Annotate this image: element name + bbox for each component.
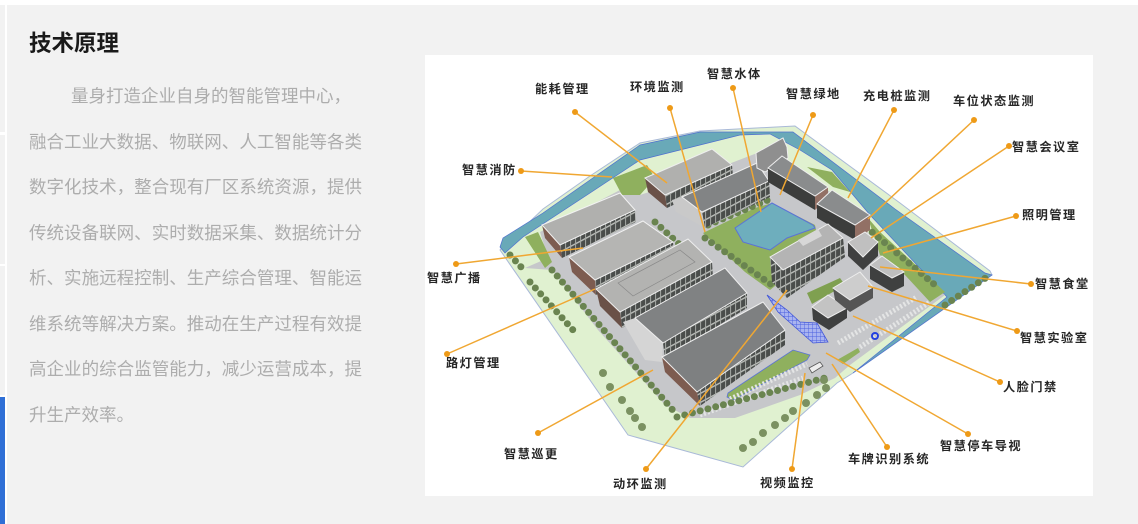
callout: 智慧绿地 xyxy=(780,86,841,195)
factory E xyxy=(662,302,785,406)
factory A xyxy=(542,193,636,258)
callout: 能耗管理 xyxy=(535,81,667,183)
callout: 智慧会议室: 智慧会议室 xyxy=(1012,139,1080,154)
tree rows xyxy=(510,200,990,417)
side navigation strip xyxy=(0,0,5,524)
callout: 照明管理 xyxy=(883,207,1077,253)
pale green grounds xyxy=(500,126,992,467)
callout: 动环监测: 动环监测 xyxy=(613,476,668,491)
callout: 路灯管理 xyxy=(444,289,595,370)
callout: 智慧停车导视 xyxy=(826,353,1022,453)
callout: 智慧水体: 智慧水体 xyxy=(707,66,762,81)
factory B xyxy=(569,221,674,295)
callout: 智慧广播 xyxy=(427,248,583,285)
factory G xyxy=(672,163,770,228)
callout: 视频监控: 视频监控 xyxy=(760,475,815,490)
building I xyxy=(817,190,870,240)
triangular lawn island xyxy=(727,350,810,400)
nav tab 2 xyxy=(0,135,5,264)
gate kiosk xyxy=(809,362,823,373)
callout: 智慧食堂 xyxy=(880,267,1090,291)
callout: 视频监控 xyxy=(760,373,815,490)
callout: 环境监测 xyxy=(630,79,705,232)
callout: 路灯管理: 路灯管理 xyxy=(446,355,501,370)
body text: 析、实施远程控制、生产综合管理、智能运 xyxy=(29,268,362,288)
callout: 智慧停车导视: 智慧停车导视 xyxy=(940,438,1022,453)
body text: 数字化技术，整合现有厂区系统资源，提供 xyxy=(29,177,362,197)
annex buildings xyxy=(812,232,904,330)
callout: 能耗管理: 能耗管理 xyxy=(535,81,590,96)
callout: 人脸门禁: 人脸门禁 xyxy=(1003,379,1058,394)
callout: 智慧消防: 智慧消防 xyxy=(462,162,517,177)
factory F xyxy=(645,149,733,208)
callout: 人脸门禁 xyxy=(853,316,1058,394)
body text: 高企业的综合监管能力，减少运营成本，提 xyxy=(29,359,362,379)
parking stripes xyxy=(700,297,930,415)
nav tab 1 xyxy=(0,5,5,132)
main office building xyxy=(770,224,845,298)
callout: 智慧广播: 智慧广播 xyxy=(427,270,482,285)
body text: 升生产效率。 xyxy=(29,405,134,425)
callout: 充电桩监测: 充电桩监测 xyxy=(863,88,931,103)
body text: 量身打造企业自身的智能管理中心， xyxy=(71,86,351,106)
callout: 智慧实验室: 智慧实验室 xyxy=(1020,330,1088,345)
factory D xyxy=(623,268,747,362)
callout: 动环监测 xyxy=(613,290,787,491)
callout: 车位状态监测 xyxy=(868,93,1035,219)
callout: 智慧会议室 xyxy=(871,139,1080,238)
body text: 传统设备联网、实时数据采集、数据统计分 xyxy=(29,223,362,243)
callout: 智慧实验室 xyxy=(868,286,1088,345)
body text: 维系统等解决方案。推动在生产过程有效提 xyxy=(29,314,362,334)
callout: 智慧食堂: 智慧食堂 xyxy=(1035,276,1090,291)
callout: 车牌识别系统 xyxy=(832,364,930,466)
callout: 智慧巡更 xyxy=(504,370,653,461)
callout: 环境监测: 环境监测 xyxy=(630,79,685,94)
callout: 车牌识别系统: 车牌识别系统 xyxy=(848,451,930,466)
lawn areas xyxy=(613,165,655,195)
tower block xyxy=(756,138,788,172)
callout: 智慧水体 xyxy=(707,66,762,212)
blue paved plaza xyxy=(767,295,828,343)
building H xyxy=(768,156,828,210)
title: 技术原理 xyxy=(29,31,119,56)
image background xyxy=(425,55,1093,496)
body text: 融合工业大数据、物联网、人工智能等各类 xyxy=(29,132,362,152)
callout: 智慧消防 xyxy=(462,162,612,177)
body text xyxy=(29,86,362,425)
blue marker xyxy=(872,333,878,339)
lawn trees xyxy=(599,369,830,452)
pond xyxy=(735,203,815,250)
callout: 车位状态监测: 车位状态监测 xyxy=(953,93,1035,108)
road network xyxy=(525,150,945,418)
callout: 智慧巡更: 智慧巡更 xyxy=(504,446,559,461)
callout: 智慧绿地: 智慧绿地 xyxy=(786,86,841,101)
park aerial view xyxy=(500,126,992,467)
callout: 照明管理: 照明管理 xyxy=(1022,207,1077,222)
factory C xyxy=(596,239,713,328)
callout: 充电桩监测 xyxy=(848,88,931,198)
nav tab 3 xyxy=(0,266,5,395)
river xyxy=(500,132,992,373)
active nav tab xyxy=(0,397,5,524)
